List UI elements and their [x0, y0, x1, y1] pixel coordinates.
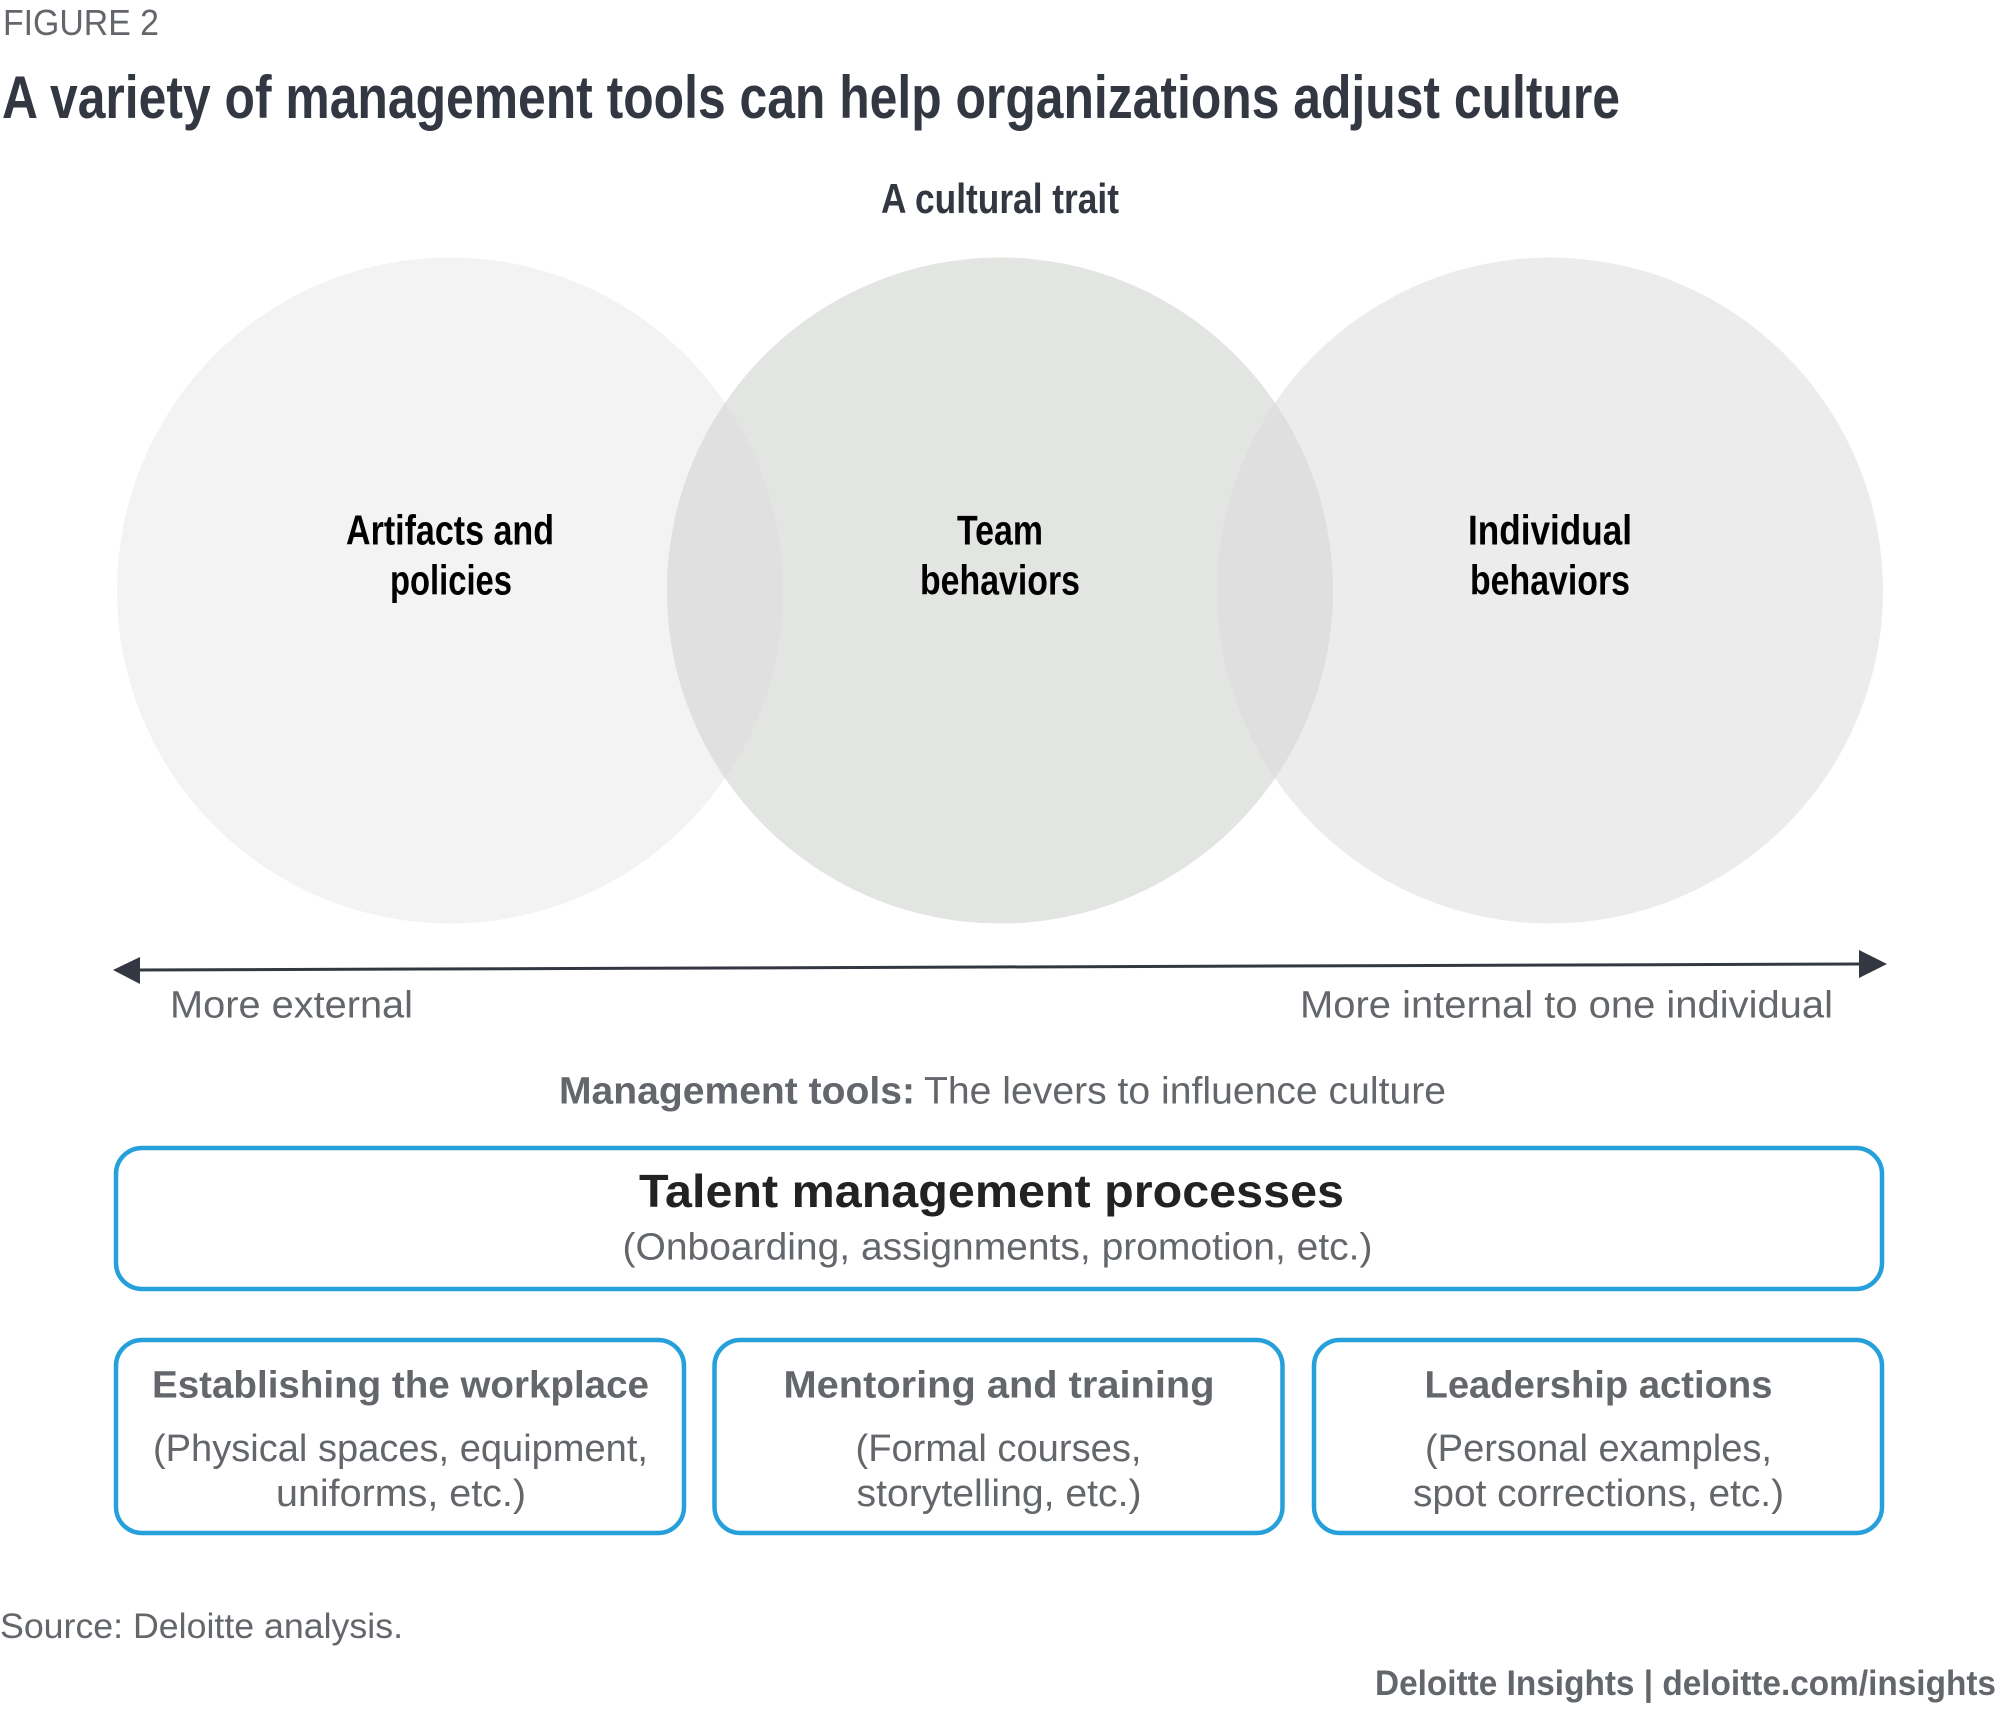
panel heading: Mentoring and training	[784, 1364, 1214, 1406]
label: individual behaviors: Individual	[1468, 506, 1632, 554]
panel detail: uniforms, etc.)	[276, 1473, 526, 1515]
panel detail: (Physical spaces, equipment,	[153, 1428, 648, 1470]
arrow: external to internal axis	[113, 950, 1887, 984]
panel detail: (Onboarding, assignments, promotion, etc.)	[622, 1226, 1372, 1268]
panel heading: Establishing the workplace	[152, 1364, 649, 1406]
label: team behaviors: Team	[957, 506, 1043, 554]
overlap: artifacts and team	[667, 403, 783, 778]
circle: team behaviors	[667, 258, 1333, 924]
label: team behaviors: behaviors	[920, 556, 1080, 604]
subheading: management tools: The levers to influence culture	[924, 1070, 1446, 1112]
panel heading: Leadership actions	[1424, 1364, 1772, 1406]
axis label: more external: More external	[170, 984, 413, 1026]
source note: Source: Deloitte analysis.	[0, 1607, 403, 1646]
panel detail: (Personal examples,	[1425, 1428, 1772, 1470]
figure label: FIGURE 2	[3, 2, 159, 43]
panel: talent management processes	[116, 1148, 1882, 1289]
panel detail: storytelling, etc.)	[856, 1473, 1142, 1515]
panel detail: spot corrections, etc.)	[1413, 1473, 1784, 1515]
panel heading: Talent management processes	[639, 1165, 1344, 1217]
panel: establishing the workplace	[116, 1340, 684, 1533]
venn diagram	[117, 258, 1883, 924]
overlap: team and individual	[1217, 403, 1333, 778]
circle: artifacts and policies	[117, 258, 783, 924]
axis label: more internal: More internal to one individual	[1300, 984, 1833, 1026]
label: artifacts and policies: Artifacts and	[346, 506, 554, 554]
panel: leadership actions	[1314, 1340, 1882, 1533]
panel detail: (Formal courses,	[856, 1428, 1142, 1470]
heading: a cultural trait: A cultural trait	[881, 175, 1119, 222]
title: A variety of management tools can help organizations adjust culture	[2, 64, 1620, 131]
label: individual behaviors: behaviors	[1470, 556, 1630, 604]
subheading: management tools: Management tools:	[559, 1070, 915, 1112]
label: artifacts and policies: policies	[390, 556, 512, 604]
circle: individual behaviors	[1217, 258, 1883, 924]
panel: mentoring and training	[714, 1340, 1282, 1533]
